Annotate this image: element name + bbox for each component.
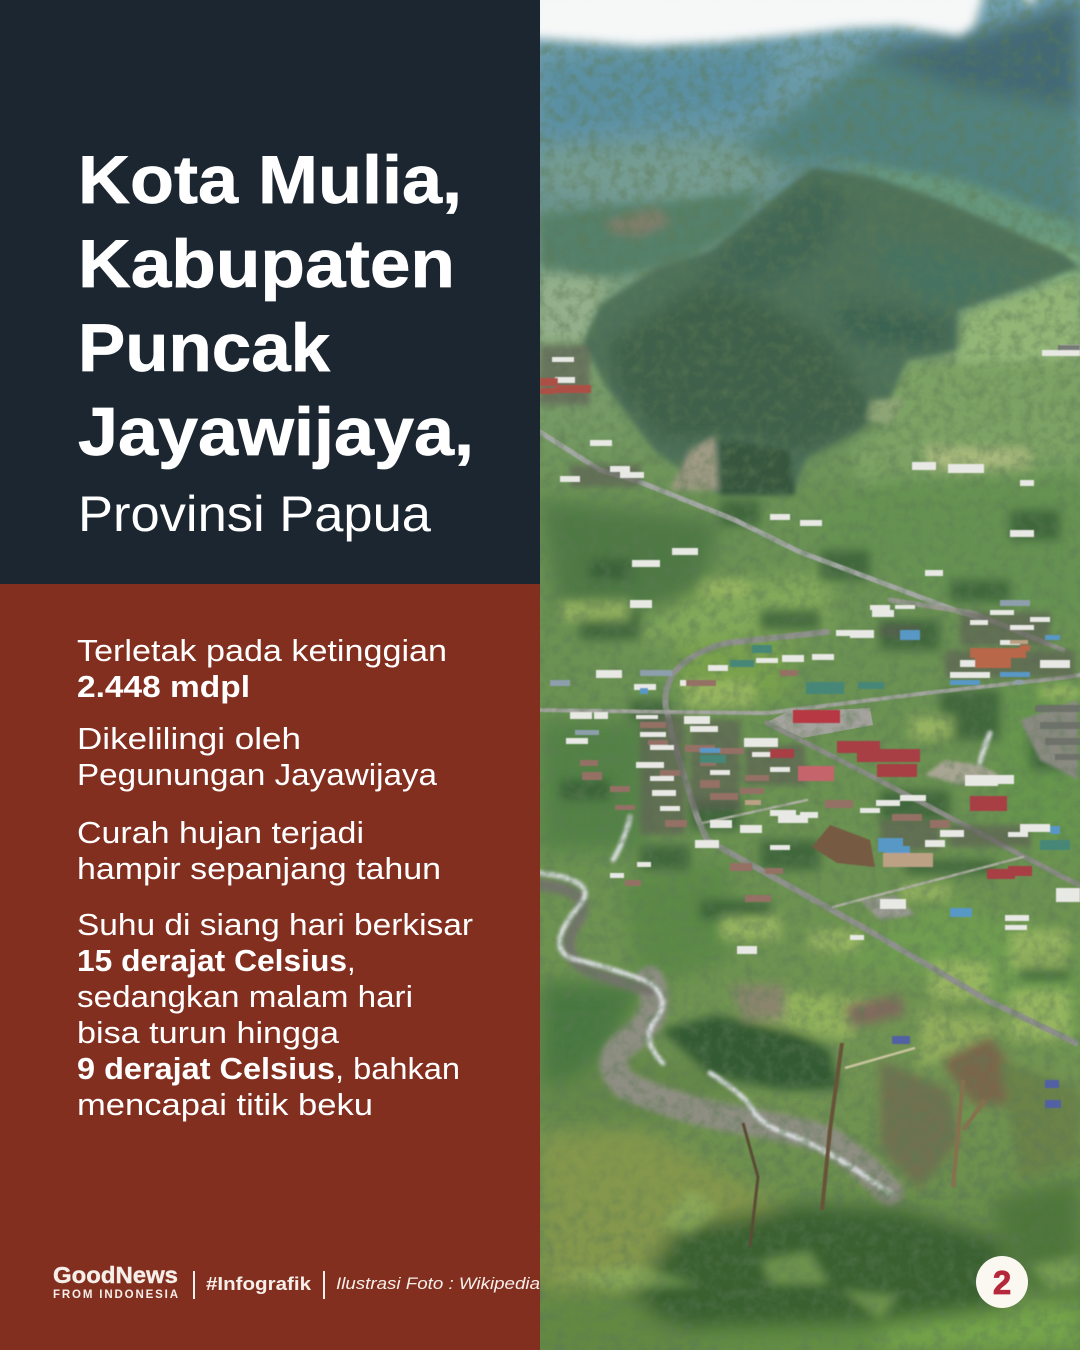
text block: surrounding mountains: Pegunungan Jayawijaya <box>77 757 438 792</box>
field and cliff details <box>660 985 1080 1190</box>
grey yard <box>767 708 873 738</box>
title: Kota Mulia, <box>78 142 462 218</box>
subtitle: Provinsi Papua <box>78 486 431 542</box>
town vegetation <box>560 500 1070 980</box>
fern leaves <box>550 1190 1080 1320</box>
river bed <box>540 733 990 1193</box>
valley floor patches <box>540 470 1080 1130</box>
text block: surrounding mountains <box>77 721 438 792</box>
right slope behind the mountain <box>858 165 1080 282</box>
text block: temperature: Suhu di siang hari berkisar <box>77 907 473 942</box>
title: Kabupaten <box>78 226 455 302</box>
distant mountain range <box>540 0 1080 231</box>
panel: description background <box>0 584 540 1350</box>
clouds <box>530 0 1040 46</box>
text block: temperature: bisa turun hingga <box>77 1015 340 1050</box>
text block: altitude: 2.448 mdpl <box>77 669 250 704</box>
photo: aerial view of Mulia valley <box>530 0 1080 1350</box>
village buildings <box>540 345 1080 1108</box>
panel: title background <box>0 0 540 584</box>
river water <box>540 733 990 1193</box>
text block: temperature: sedangkan malam hari <box>77 979 413 1014</box>
logo: GoodNews from Indonesia: FROM INDONESIA <box>53 1289 178 1301</box>
left hill <box>540 190 760 340</box>
hashtag: #Infografik <box>206 1273 312 1294</box>
logo: GoodNews from Indonesia <box>53 1262 178 1301</box>
page number badge <box>976 1256 1028 1308</box>
valley right of mountain <box>850 275 1080 490</box>
photo credit: Ilustrasi Foto : Wikipedia <box>336 1275 540 1293</box>
title: Puncak <box>78 310 330 386</box>
text block: altitude <box>77 633 447 704</box>
footer: brand and credit <box>53 1262 540 1301</box>
roads <box>540 432 1080 1043</box>
text block: temperature: 9 derajat Celsius <box>77 1051 335 1086</box>
dark rooftop shadows <box>540 345 1075 850</box>
text block: rainfall: Curah hujan terjadi <box>77 815 364 850</box>
logo: GoodNews from Indonesia: GoodNews <box>53 1262 178 1288</box>
title: Jayawijaya, <box>78 394 474 470</box>
text block: temperature: 15 derajat Celsius <box>77 943 347 978</box>
dark buildings at right <box>1035 345 1080 760</box>
title <box>78 142 474 470</box>
bright fields <box>560 580 1080 1040</box>
text block: rainfall: hampir sepanjang tahun <box>77 851 441 886</box>
page number badge: 2 <box>993 1264 1011 1301</box>
text block: temperature: mencapai titik beku <box>77 1087 373 1122</box>
text block: temperature: , <box>347 943 356 978</box>
main mountain <box>583 167 1080 493</box>
text block: temperature <box>77 907 473 1122</box>
bare branches <box>743 1043 985 1247</box>
text block: surrounding mountains: Dikelilingi oleh <box>77 721 301 756</box>
text block: altitude: Terletak pada ketinggian <box>77 633 447 668</box>
text block: rainfall <box>77 815 441 886</box>
foreground hillside <box>540 1130 1080 1350</box>
text block: temperature: , bahkan <box>335 1051 460 1086</box>
texture speckle <box>540 0 1080 1199</box>
